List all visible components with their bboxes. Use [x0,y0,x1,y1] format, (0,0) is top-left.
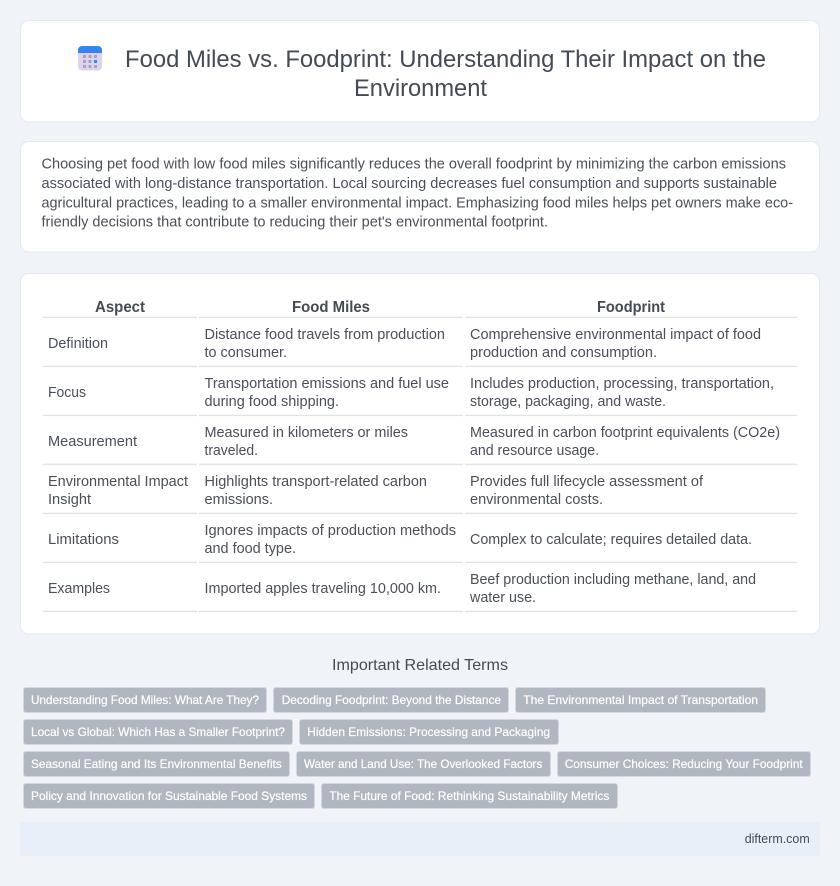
row: definition: Comprehensive environmental impact of food [470,327,761,343]
row: limitations: and food type. [204,541,296,557]
row: examples: Examples [48,581,110,597]
panel: header [20,20,820,122]
tag [558,752,810,776]
row: examples [48,572,756,606]
tag: Local vs Global: Which Has a Smaller Footprint? [31,725,285,739]
row: environmental impact insight: emissions. [204,492,273,508]
row: limitations [48,523,752,557]
row: measurement: Measurement [48,434,137,450]
tag: Understanding Food Miles: What Are They? [31,693,259,707]
row: measurement [48,425,780,459]
row: focus: Focus [48,385,86,401]
table header: Foodprint [597,299,666,316]
tag [24,688,266,712]
panel: intro paragraph [20,142,820,252]
row: definition: to consumer. [204,345,287,361]
tag: Policy and Innovation for Sustainable Food Systems [31,789,307,803]
tag [300,720,558,744]
row: definition: Distance food travels from production [204,327,445,343]
panel: intro paragraph: friendly decisions that contribute to reducing their pet's environmental footprint. [42,214,548,230]
row: environmental impact insight: Highlights transport-related carbon [204,474,427,490]
row: measurement: Measured in carbon footprint equivalents (CO2e) [470,425,780,441]
footer [20,822,820,856]
row: examples: Imported apples traveling 10,000 km. [204,581,441,597]
row: measurement: traveled. [204,443,258,459]
row: focus: Transportation emissions and fuel use [204,376,449,392]
panel: intro paragraph: associated with long-distance transportation. Local sourcing decreases fuel consumption and supports sustainable [42,176,777,192]
heading: important related terms: Important Related Terms [332,657,508,674]
tag [296,752,550,776]
row: environmental impact insight: Environmental Impact [48,474,188,490]
icon: calendar [78,46,102,70]
table header [95,299,666,316]
tag: Decoding Foodprint: Beyond the Distance [282,693,501,707]
row: examples: Beef production including methane, land, and [470,572,756,588]
row: focus: during food shipping. [204,394,339,410]
title [125,46,766,102]
row: environmental impact insight: Insight [48,492,91,508]
tag: Water and Land Use: The Overlooked Factors [304,757,542,771]
row: definition: production and consumption. [470,345,657,361]
tag [322,784,618,808]
row: definition [48,327,761,361]
row: limitations: Limitations [48,532,119,548]
row: examples: water use. [469,590,536,606]
row: environmental impact insight: Provides full lifecycle assessment of [470,474,704,490]
tag: The Environmental Impact of Transportation [523,693,758,707]
table header: Aspect [95,299,146,316]
row: limitations: Complex to calculate; requires detailed data. [470,532,752,548]
row: measurement: and resource usage. [470,443,599,459]
tag: Seasonal Eating and Its Environmental Benefits [31,757,282,771]
panel: related term tags [24,688,810,808]
panel: intro paragraph: Choosing pet food with low food miles significantly reduces the overall foodprint by minimizing the carbon emissions [42,156,786,172]
tag: Hidden Emissions: Processing and Packaging [307,725,550,739]
row: focus: storage, packaging, and waste. [470,394,666,410]
title: Food Miles vs. Foodprint: Understanding Their Impact on the [125,46,766,73]
row: environmental impact insight: environmental costs. [470,492,603,508]
row: focus [48,376,774,410]
row: measurement: Measured in kilometers or miles [204,425,408,441]
row: limitations: Ignores impacts of production methods [204,523,456,539]
table header: Food Miles [292,299,370,316]
tag [24,784,314,808]
row: definition: Definition [48,336,108,352]
tag [24,752,290,776]
title: Environment [354,75,487,102]
footer: difterm.com [745,831,810,846]
tag [24,720,292,744]
tag [516,688,766,712]
panel: comparison table [20,274,820,634]
panel: intro paragraph: agricultural practices, leading to a smaller environmental impact. Emphasizing food miles helps pet owners make eco- [42,196,793,212]
row: focus: Includes production, processing, transportation, [470,376,774,392]
tag [274,688,508,712]
tag: Consumer Choices: Reducing Your Foodprint [565,757,803,771]
tag: The Future of Food: Rethinking Sustainability Metrics [329,789,609,803]
row: environmental impact insight [48,474,704,508]
